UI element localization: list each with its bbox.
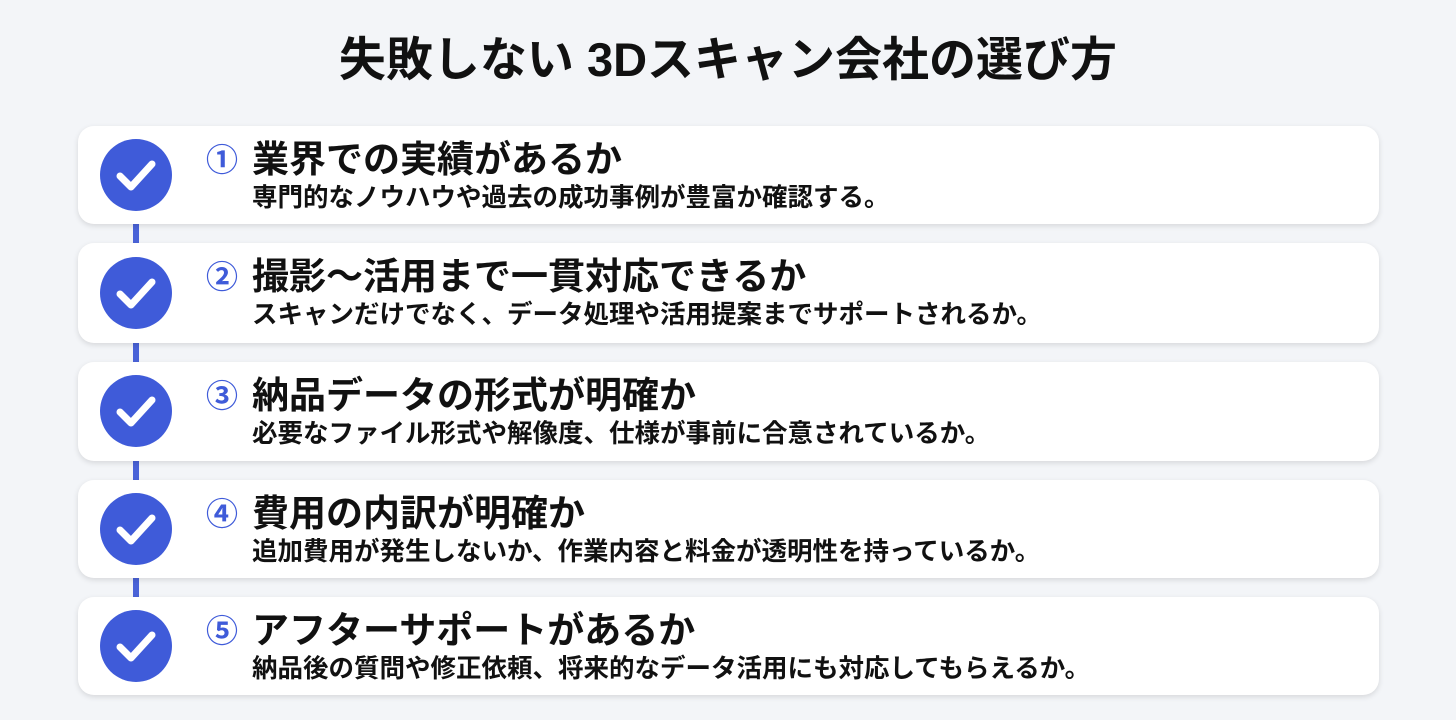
card 2: ② (206, 259, 238, 295)
icon: check (100, 139, 172, 211)
text 1: 専門的なノウハウや過去の成功事例が豊富か確認する。 (252, 184, 890, 212)
card 4 (78, 480, 1379, 578)
heading 2: 撮影〜活用まで一貫対応できるか (252, 256, 806, 297)
card 3: ③ (206, 378, 238, 414)
text 4: 追加費用が発生しないか、作業内容と料金が透明性を持っているか。 (252, 538, 1040, 566)
heading 4: 費用の内訳が明確か (252, 493, 585, 534)
text 2: スキャンだけでなく、データ処理や活用提案までサポートされるか。 (252, 301, 1042, 329)
text 5: 納品後の質問や修正依頼、将来的なデータ活用にも対応してもらえるか。 (252, 655, 1090, 683)
title: 失敗しない 3Dスキャン会社の選び方 (339, 33, 1117, 86)
card 2 (78, 243, 1379, 343)
card 3 (78, 362, 1379, 461)
heading 1: 業界での実績があるか (252, 139, 622, 180)
icon: check (100, 375, 172, 447)
icon: check (100, 610, 172, 682)
card 4: ④ (206, 496, 238, 532)
card 5: ⑤ (206, 613, 238, 649)
icon: check (100, 257, 172, 329)
card 5 (78, 597, 1379, 695)
heading 5: アフターサポートがあるか (252, 610, 695, 651)
card 1 (78, 126, 1379, 224)
heading 3: 納品データの形式が明確か (252, 375, 696, 416)
text 3: 必要なファイル形式や解像度、仕様が事前に合意されているか。 (252, 420, 990, 448)
icon: check (100, 493, 172, 565)
card 1: ① (206, 142, 238, 178)
